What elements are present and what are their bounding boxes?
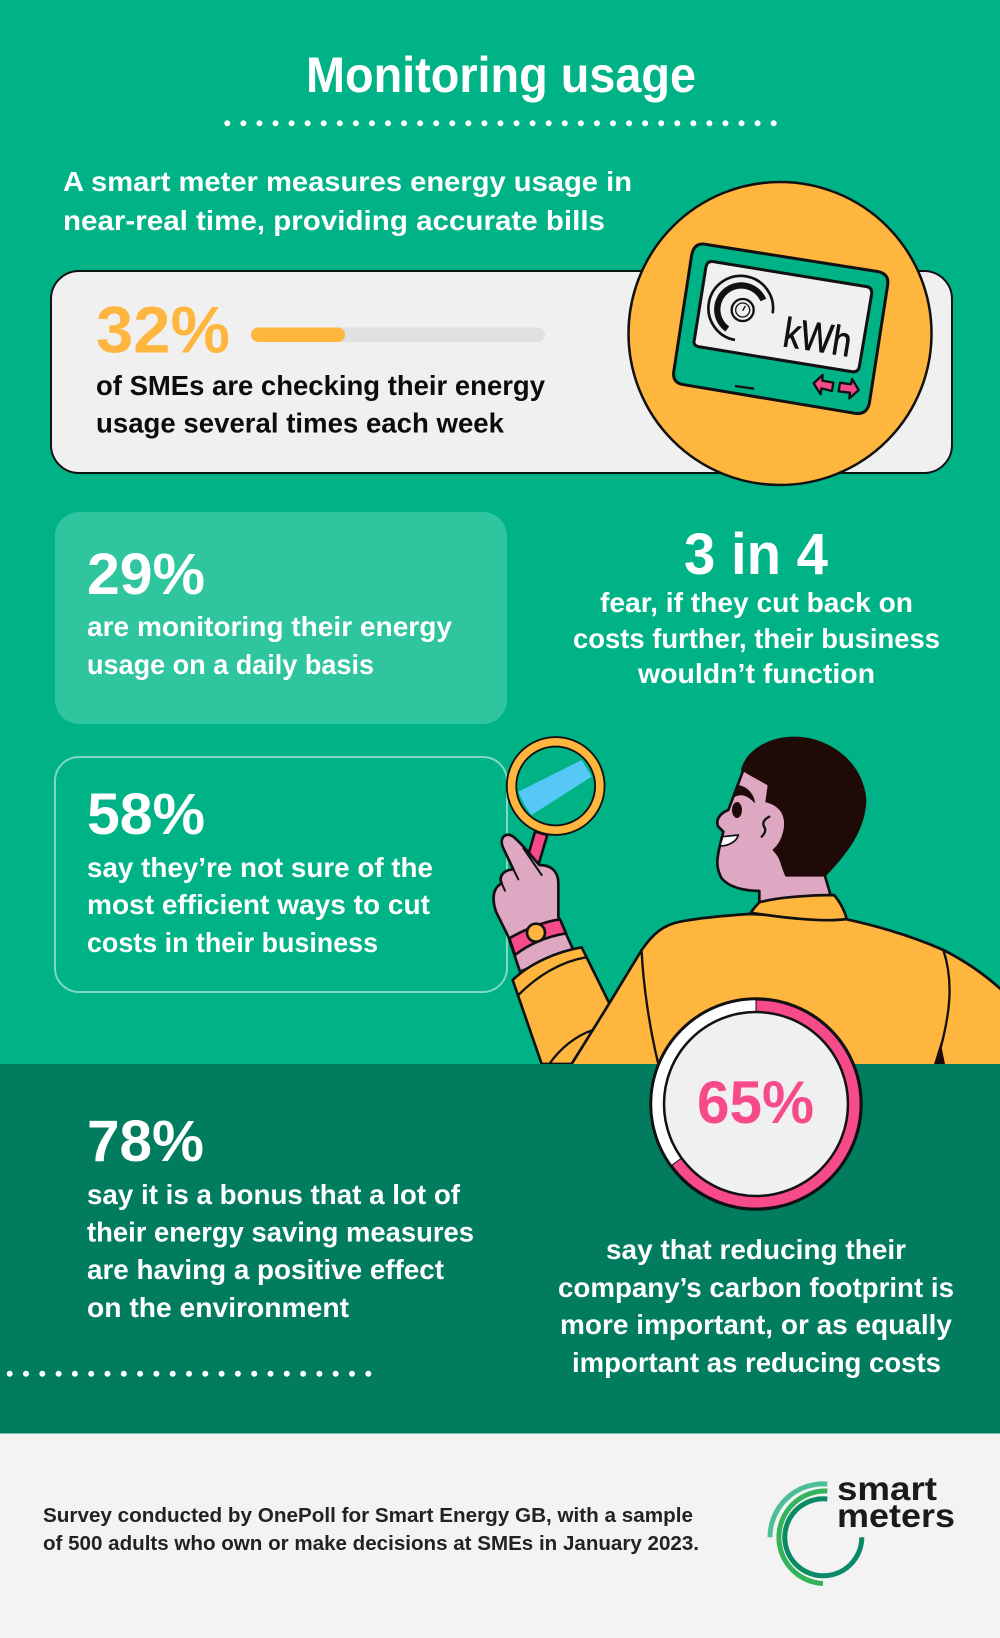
panel text: of SMEs are checking their energy [96,370,545,401]
illustration: person with magnifying glass [494,737,1000,1065]
stat: 78% environment: on the environment [87,1292,349,1323]
panel: 58% not sure [55,757,507,992]
text: carbon footprint: say that reducing their [606,1234,906,1265]
chart: 65% donut: 65% [697,1069,814,1136]
stat: 78% environment [87,1109,474,1323]
stat: 32%: 32% [96,292,230,366]
panel: 32% of SMEs [51,271,952,473]
source note: Survey conducted by OnePoll for Smart Energy GB, with a sample [43,1505,693,1527]
stat: 3 in 4: wouldn’t function [637,658,875,689]
stat: 3 in 4: costs further, their business [573,623,940,654]
sleeve [513,947,609,1064]
watch [509,919,566,955]
text: carbon footprint: more important, or as equally [560,1309,952,1340]
logo: smart meters: meters [837,1497,955,1534]
stat: 78% environment: their energy saving measures [87,1216,474,1248]
neck and face [717,770,831,903]
stat: 3 in 4: fear, if they cut back on [600,587,913,618]
panel: 29% daily: usage on a daily basis [87,649,374,680]
icon: smart meter in circle: kWh [780,308,855,366]
logo: smart meters [770,1470,955,1584]
panel: 29% daily: 29% [87,542,205,607]
panel: 29% daily: are monitoring their energy [87,611,452,642]
source note: of 500 adults who own or make decisions at SMEs in January 2023. [43,1533,699,1555]
source note [43,1505,699,1555]
stat: 78% environment: 78% [87,1109,204,1174]
footer [0,1434,1000,1638]
stat: 78% environment: say it is a bonus that a lot of [87,1179,461,1210]
repaint band over illustration base [0,1064,1000,1072]
panel: 58% not sure: say they’re not sure of the [87,852,433,883]
text: carbon footprint: company’s carbon footprint is [558,1272,954,1303]
text: carbon footprint [558,1234,954,1378]
intro text: A smart meter measures energy usage in [63,166,632,197]
facial features [720,785,769,846]
panel: 58% not sure: costs in their business [87,927,378,958]
stat: 3 in 4: 3 in 4 [684,522,828,587]
panel: 58% not sure: most efficient ways to cut [87,889,430,920]
torso [572,914,1000,1065]
panel: 58% not sure: 58% [87,782,205,847]
stat: 78% environment: are having a positive effect [87,1254,444,1285]
heading: Monitoring usage: Monitoring usage [306,47,696,103]
intro text [63,166,632,236]
logo: smart meters: smart [837,1470,937,1507]
icon: smart meter in circle [628,182,932,485]
progress bar [251,328,545,342]
hair [742,737,866,876]
magnifier handle [528,832,547,865]
intro text: near-real time, providing accurate bills [63,205,605,236]
hand [494,835,573,972]
chart: 65% donut [650,998,862,1210]
panel text: usage several times each week [96,408,504,438]
text: carbon footprint: important as reducing costs [572,1347,941,1378]
magnifier [511,742,600,830]
panel text [96,370,545,438]
collar [751,895,847,920]
dark green band [0,1064,1000,1434]
stat: 3 in 4 [573,522,940,689]
panel: 29% daily [55,512,507,724]
